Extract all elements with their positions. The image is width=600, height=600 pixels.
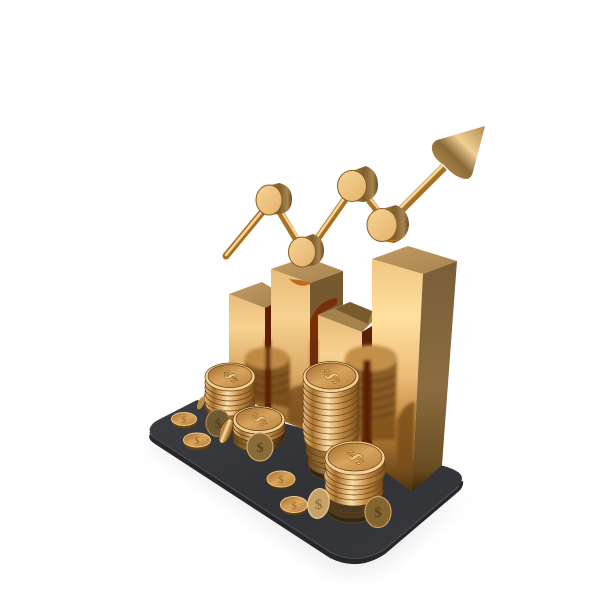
bar 2 <box>271 257 343 432</box>
loose coin 6: $ <box>278 474 284 486</box>
standing coin 8: $ <box>315 497 323 513</box>
loose coin 6 <box>266 471 296 490</box>
loose coin 2: $ <box>194 436 200 447</box>
loose coin 2 <box>183 433 211 450</box>
joint 1 <box>256 183 292 216</box>
joint 2 <box>288 234 324 268</box>
bar 4 <box>372 246 457 492</box>
standing coin 5 <box>247 433 273 461</box>
standing coin 3 <box>206 410 230 436</box>
loose coin 7: $ <box>291 500 297 512</box>
coin stack B <box>233 406 285 452</box>
loose coin 1: $ <box>182 415 186 426</box>
arrow line segment 4 <box>366 196 382 214</box>
arrow line segment 5 <box>394 165 444 216</box>
arrow line segment 3 <box>312 197 346 245</box>
arrow line segment 2 <box>280 212 300 242</box>
arrow head cone <box>432 126 485 179</box>
loose coin 7 <box>280 496 308 515</box>
plate shadow <box>145 420 470 576</box>
coin stack A <box>204 363 255 421</box>
joint 3 <box>337 166 378 202</box>
standing coin 3: $ <box>214 417 222 432</box>
arrow line segment 1 <box>226 210 264 256</box>
standing coin 9: $ <box>374 505 382 521</box>
coin stack D front: $ <box>342 446 369 468</box>
standing coin 5: $ <box>256 441 264 456</box>
coin stack A: $ <box>220 367 243 386</box>
bar 3 <box>318 302 372 450</box>
blurred coin reflections in bars <box>245 340 415 470</box>
edge-on coin 4 <box>216 417 236 445</box>
tilted coin behind stack A <box>195 395 207 411</box>
loose coin 1 <box>171 412 197 428</box>
joint 4 <box>366 205 409 243</box>
standing coin 9 <box>365 496 391 528</box>
coin stack C tall <box>302 362 359 480</box>
coin stack C tall: $ <box>318 365 345 387</box>
coin stack B: $ <box>248 410 272 429</box>
bar 1 <box>229 282 272 410</box>
coin stack D front <box>324 441 386 523</box>
dark base plate <box>149 400 463 564</box>
standing coin 8 <box>306 487 331 520</box>
